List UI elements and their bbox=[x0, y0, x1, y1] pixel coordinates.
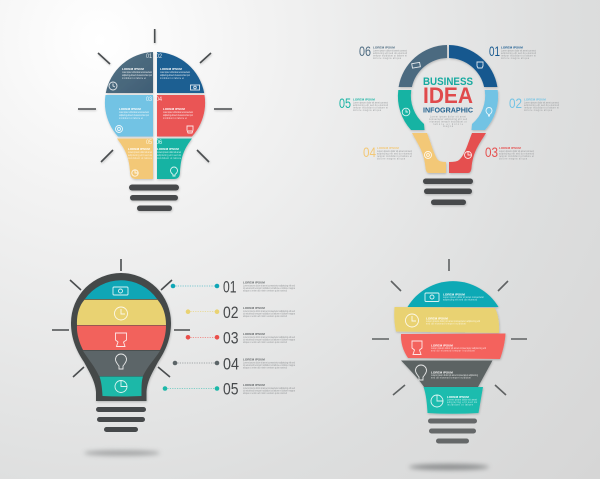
segment 05: 05 bbox=[146, 139, 152, 146]
bulb outline bbox=[71, 273, 171, 401]
segment 04: incididunt ut labore et bbox=[163, 117, 187, 120]
list row 01: aliqua ut enim ad minim veniam quis nostrud bbox=[243, 290, 288, 292]
label 01: adipiscing elit sed do eiusmod bbox=[501, 52, 537, 55]
band 5 teal bbox=[100, 376, 143, 396]
list row 03: LOREM IPSUM bbox=[243, 332, 265, 336]
label 02 bbox=[509, 95, 560, 112]
panel: bulb four, offset slices bbox=[372, 259, 527, 470]
segment 05 bbox=[117, 138, 153, 179]
segment 06 bbox=[399, 45, 447, 87]
label 01: LOREM IPSUM bbox=[501, 46, 523, 50]
segment 04: 04 bbox=[156, 96, 162, 103]
label 06: dolore magna aliqua bbox=[373, 57, 402, 60]
label 06: 06 bbox=[359, 43, 371, 59]
heading: business idea infographic: IDEA bbox=[423, 83, 473, 108]
label 01: 01 bbox=[489, 43, 500, 59]
rays bbox=[52, 259, 190, 377]
label 03 bbox=[485, 144, 535, 160]
band 2 yellow bbox=[77, 300, 166, 325]
label 01: Lorem ipsum dolor sit amet consect bbox=[501, 50, 536, 52]
segment 05: Lorem ipsum dolor sit amet bbox=[128, 151, 152, 154]
centre text block bbox=[429, 116, 468, 128]
slice 2 yellow bbox=[394, 307, 499, 333]
segment 04: LOREM IPSUM bbox=[163, 107, 185, 111]
label 05: adipiscing elit sed do eiusmod bbox=[353, 104, 389, 107]
list row 02: aliqua ut enim ad minim veniam quis nostrud bbox=[243, 315, 288, 318]
list row 03: aliqua ut enim ad minim veniam quis nostrud bbox=[243, 341, 288, 344]
label 05: LOREM IPSUM bbox=[353, 98, 375, 102]
rays bbox=[372, 259, 527, 395]
list row 02 bbox=[186, 304, 296, 322]
list row 01: do eiusmod tempor incididunt ut labore et dolore magna bbox=[243, 287, 296, 290]
segment 06 bbox=[156, 138, 192, 179]
list row 01: 01 bbox=[223, 278, 236, 296]
slice 3 red: LOREM IPSUM bbox=[431, 344, 453, 348]
slice 1 teal: LOREM IPSUM bbox=[443, 292, 465, 296]
list row 03: Lorem ipsum dolor sit amet consectetur adipiscing elit sed bbox=[243, 336, 296, 339]
list row 05: Lorem ipsum dolor sit amet consectetur adipiscing elit sed bbox=[243, 387, 296, 390]
segment 04: Lorem ipsum dolor sit amet consectetur bbox=[163, 111, 193, 114]
label 05 bbox=[339, 95, 389, 112]
list row 03 bbox=[186, 330, 296, 348]
slice 1 teal bbox=[408, 281, 498, 307]
list row 02: Lorem ipsum dolor sit amet consectetur adipiscing elit sed bbox=[243, 310, 296, 313]
segment 03: incididunt ut labore et bbox=[119, 117, 143, 120]
segment 06: incididunt ut labore bbox=[157, 157, 182, 160]
segment 02: 02 bbox=[156, 53, 162, 60]
segment 02 bbox=[156, 52, 204, 93]
label 04: 04 bbox=[363, 144, 376, 160]
label 02: dolore magna aliqua bbox=[524, 109, 553, 112]
label 06: LOREM IPSUM bbox=[373, 46, 395, 50]
label 03: dolore magna aliqua bbox=[499, 158, 528, 160]
segment 06: adipiscing elit sed do bbox=[157, 154, 182, 157]
slice 1 teal: Lorem ipsum dolor sit amet consectetur bbox=[443, 296, 484, 299]
list row 01: LOREM IPSUM bbox=[243, 280, 265, 284]
lamp base bars bbox=[423, 178, 473, 205]
list row 05: aliqua ut enim ad minim veniam quis nostrud bbox=[243, 392, 288, 395]
list row 01 bbox=[171, 278, 296, 296]
segment 04 bbox=[156, 95, 205, 136]
label 03: LOREM IPSUM bbox=[499, 146, 521, 150]
label 02: adipiscing elit sed do eiusmod bbox=[524, 104, 560, 107]
lamp base bars bbox=[96, 407, 146, 432]
slice 2 yellow: sed do eiusmod tempor incididunt bbox=[426, 322, 466, 326]
segment 05: LOREM IPSUM bbox=[128, 147, 150, 151]
segment 01: incididunt ut labore et bbox=[122, 77, 146, 80]
list row 05: do eiusmod tempor incididunt ut labore et dolore magna bbox=[243, 390, 296, 392]
label 01: tempor incididunt ut labore et bbox=[501, 54, 536, 58]
label 03: 03 bbox=[485, 144, 498, 160]
heading: business idea infographic bbox=[423, 76, 474, 114]
label 05: tempor incididunt ut labore et bbox=[353, 106, 388, 110]
segment 01 bbox=[449, 45, 497, 87]
heading: business idea infographic: INFOGRAPHIC bbox=[423, 106, 474, 114]
label 06: adipiscing elit sed do eiusmod bbox=[373, 52, 408, 55]
centre text block: Lorem ipsum dolor sit amet bbox=[430, 116, 466, 118]
list row 04: 04 bbox=[223, 356, 239, 374]
slice 3 red: sed do eiusmod tempor incididunt bbox=[431, 350, 475, 352]
label 04: LOREM IPSUM bbox=[377, 146, 399, 150]
label 02: 02 bbox=[509, 95, 522, 111]
list row 04: Lorem ipsum dolor sit amet consectetur adipiscing elit sed bbox=[243, 362, 296, 364]
segment 02: Lorem ipsum dolor sit amet consectetur bbox=[160, 71, 190, 74]
slice 5 teal bbox=[424, 387, 483, 414]
list row 04: LOREM IPSUM bbox=[243, 358, 265, 362]
segment 06: Lorem ipsum dolor sit amet bbox=[157, 151, 181, 154]
slice 2 yellow: Lorem ipsum dolor sit amet consectetur adipiscing elit bbox=[426, 320, 480, 323]
label 04: adipiscing elit sed do eiusmod bbox=[377, 152, 413, 156]
segment 06: LOREM IPSUM bbox=[157, 147, 179, 151]
list row 01: Lorem ipsum dolor sit amet consectetur adipiscing elit sed bbox=[243, 284, 296, 288]
slice 4 slate: Lorem ipsum dolor sit amet consectetur adipiscing bbox=[431, 374, 479, 377]
label 06: Lorem ipsum dolor sit amet consect bbox=[373, 50, 407, 52]
label 01: dolore magna aliqua bbox=[501, 57, 530, 60]
label 06 bbox=[359, 43, 408, 60]
band 3 red bbox=[77, 326, 166, 350]
label 02: LOREM IPSUM bbox=[524, 98, 546, 102]
segment 02: LOREM IPSUM bbox=[160, 67, 182, 71]
slice 3 red: Lorem ipsum dolor sit amet consectetur adipiscing elit bbox=[431, 347, 486, 350]
centre text block: labore et dolore bbox=[433, 123, 464, 126]
segment 01: Lorem ipsum dolor sit amet consectetur bbox=[122, 71, 152, 74]
segment 03: LOREM IPSUM bbox=[119, 107, 141, 111]
slice 5 teal: incididunt ut labore bbox=[447, 404, 474, 406]
ground shadow bbox=[409, 464, 489, 470]
segment 06: 06 bbox=[156, 139, 162, 146]
label 01 bbox=[489, 43, 537, 60]
segment 01: LOREM IPSUM bbox=[122, 67, 144, 71]
segment 01: adipiscing elit sed do eiusmod tempor bbox=[122, 74, 152, 77]
slice 4 slate: LOREM IPSUM bbox=[431, 370, 453, 374]
band 1 teal bbox=[85, 280, 157, 299]
segment 02 bbox=[472, 90, 498, 130]
label 03: Lorem ipsum dolor sit amet consect bbox=[499, 150, 534, 153]
band 4 slate bbox=[83, 351, 160, 376]
list row 02: do eiusmod tempor incididunt ut labore et dolore magna bbox=[243, 312, 296, 316]
heading: business idea infographic: BUSINESS bbox=[423, 76, 473, 88]
ground shadow bbox=[84, 450, 160, 456]
slice 1 teal: adipiscing elit sed do eiusmod bbox=[443, 298, 478, 302]
slice 5 teal: Lorem ipsum dolor sit amet bbox=[447, 398, 477, 402]
list row 04 bbox=[173, 356, 296, 374]
segment 01: 01 bbox=[146, 53, 152, 60]
segment 04: adipiscing elit sed do eiusmod tempor bbox=[163, 114, 193, 117]
label 05: Lorem ipsum dolor sit amet consect bbox=[353, 102, 388, 104]
list row 05: 05 bbox=[223, 380, 238, 398]
centre text block: magna bbox=[443, 126, 454, 128]
segment 01 bbox=[106, 52, 153, 93]
centre text block: consectetur adipiscing elit sed bbox=[429, 118, 468, 121]
segment 03: adipiscing elit sed do eiusmod tempor bbox=[119, 114, 149, 117]
list row 04: do eiusmod tempor incididunt ut labore et dolore magna bbox=[243, 364, 296, 367]
label 03: tempor incididunt ut labore et bbox=[499, 155, 534, 158]
segment 05: adipiscing elit sed do bbox=[128, 154, 153, 157]
label 05: 05 bbox=[339, 95, 351, 111]
list row 05 bbox=[163, 380, 296, 398]
list row 02: 02 bbox=[223, 304, 238, 322]
label 02: tempor incididunt ut labore et bbox=[524, 106, 559, 110]
list row 04: aliqua ut enim ad minim veniam quis nostrud bbox=[243, 366, 288, 370]
label 06: tempor incididunt ut labore et bbox=[373, 54, 407, 58]
slice 5 teal: LOREM IPSUM bbox=[447, 395, 469, 399]
slice 4 slate bbox=[401, 360, 492, 387]
segment 05 bbox=[398, 90, 424, 130]
segment 05: incididunt ut labore bbox=[128, 157, 153, 160]
segment 02: incididunt ut labore et bbox=[160, 77, 184, 80]
list row 02: LOREM IPSUM bbox=[243, 306, 265, 310]
label 04: Lorem ipsum dolor sit amet consect bbox=[377, 150, 412, 153]
segment 03 bbox=[105, 95, 153, 136]
list row 03: do eiusmod tempor incididunt ut labore et dolore magna bbox=[243, 338, 296, 342]
slice 3 red bbox=[401, 334, 506, 359]
panel: bulb one, six quadrants bbox=[78, 29, 232, 211]
panel: bulb three, stacked bands with list bbox=[52, 259, 296, 456]
centre text block: eiusmod tempor incididunt ut bbox=[430, 120, 467, 124]
label 04: dolore magna aliqua bbox=[377, 158, 406, 160]
segment 03 bbox=[449, 133, 486, 173]
lamp base bars bbox=[129, 184, 179, 211]
label 04 bbox=[363, 144, 413, 160]
segment 04 bbox=[412, 133, 446, 173]
segment 02: adipiscing elit sed do eiusmod tempor bbox=[160, 74, 190, 77]
lamp base bars bbox=[428, 418, 477, 444]
list row 05: LOREM IPSUM bbox=[243, 383, 265, 387]
segment 03: 03 bbox=[146, 96, 152, 103]
rays bbox=[78, 29, 232, 162]
label 02: Lorem ipsum dolor sit amet consect bbox=[524, 102, 559, 104]
list row 03: 03 bbox=[223, 330, 238, 348]
slice 2 yellow: LOREM IPSUM bbox=[426, 316, 448, 320]
segment 03: Lorem ipsum dolor sit amet consectetur bbox=[119, 111, 149, 114]
label 05: dolore magna aliqua bbox=[353, 109, 382, 112]
panel: bulb two, ring bbox=[339, 43, 560, 205]
label 04: tempor incididunt ut labore et bbox=[377, 155, 412, 158]
label 03: adipiscing elit sed do eiusmod bbox=[499, 152, 535, 156]
slice 5 teal: adipiscing elit sed do bbox=[447, 401, 478, 404]
slice 4 slate: sed do eiusmod tempor incididunt bbox=[431, 376, 471, 380]
